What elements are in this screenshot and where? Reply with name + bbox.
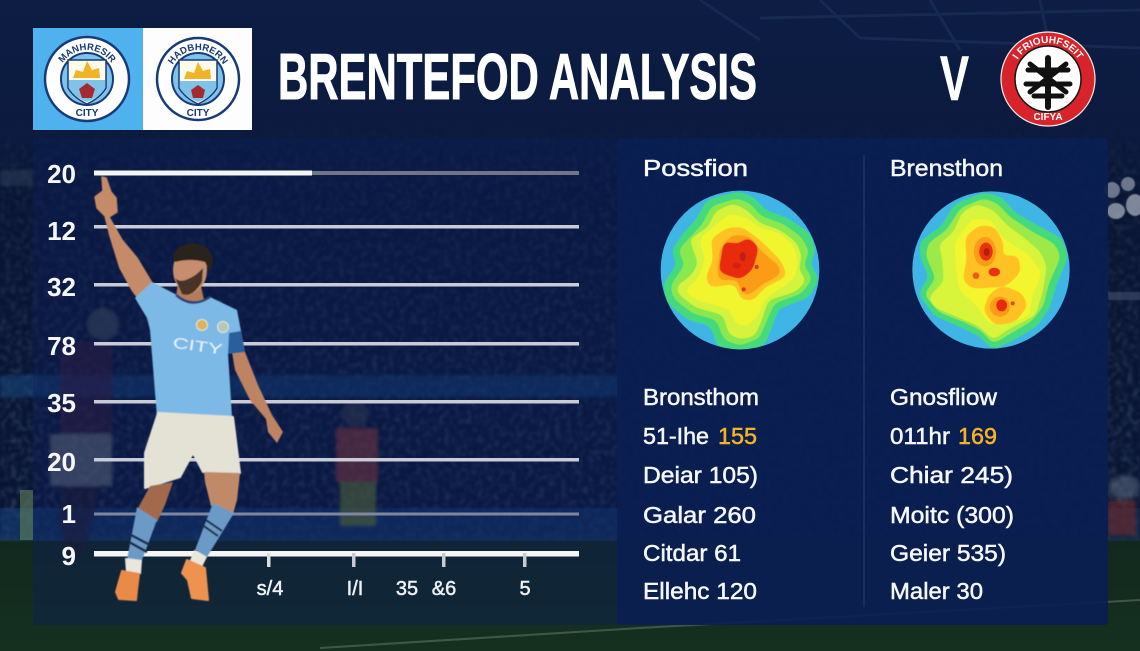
stats list: Gnosfliow column: 169 [958,423,997,449]
heading: Brensthon: Brensthon [890,155,1003,181]
y axis labels: 32 [47,272,76,302]
stats list: Bronsthom column: Ellehc 120 [643,578,757,604]
raised arm [95,177,153,298]
armband [228,331,245,354]
front boot [182,560,208,600]
panel: left chart backdrop [33,138,617,625]
jersey sponsor text: CITY [172,335,224,358]
jersey crests [196,320,228,332]
badge: Manchester City on white [143,28,252,130]
gridlines [94,170,579,567]
stats list: Bronsthom column: Citdar 61 [643,540,741,566]
y axis labels: 12 [47,216,76,246]
x axis labels: 35 [396,578,418,600]
stats list: Gnosfliow column: Gnosfliow [890,384,997,410]
stats list: Bronsthom column: Bronsthom [643,384,759,410]
x axis labels [257,578,531,600]
versus mark: V [940,44,969,114]
badge: Brentford red crest [1000,31,1096,127]
heading: Possfion: Possfion [643,155,748,181]
stats list: Bronsthom column: Galar 260 [643,502,756,528]
front leg [204,472,240,514]
blue jersey [135,282,245,417]
stats list: Gnosfliow column: Geier 535) [890,540,1006,566]
back leg [137,482,173,522]
badge: Manchester City on light blue [33,28,143,130]
y axis labels: 35 [47,388,76,418]
badge: Brentford red crest: I FRIOUHFSEIT [1012,36,1084,60]
stats list: Gnosfliow column: Chiar 245) [890,462,1013,488]
y axis labels: 9 [62,541,76,571]
stats list: Bronsthom column [643,384,759,604]
stats list: Bronsthom column: Deiar 105) [643,462,758,488]
stats list: Gnosfliow column [890,384,1014,604]
badge: Manchester City on white: CITY [187,108,210,119]
stats list: Bronsthom column: 51-Ihe [643,423,709,449]
y axis labels: 1 [62,499,76,529]
y axis labels: 20 [47,159,76,189]
stats list: Gnosfliow column: 011hr [890,423,950,449]
y axis labels: 78 [47,331,76,361]
x axis labels: s/4 [257,578,283,600]
player figure [95,177,283,600]
title: BRENTEFOD ANALYSIS [278,40,757,113]
badge: Manchester City on light blue: MANHRESIR [58,43,116,63]
y axis labels: 20 [47,447,76,477]
badge: Brentford red crest: CIFYA [1033,112,1063,123]
heatmap: Brensthon [912,191,1070,350]
divider between stats columns [864,155,865,607]
blurred background players [50,308,378,555]
lowered arm [232,352,283,443]
panel: right stats backdrop [617,138,1108,625]
x axis labels: &6 [432,578,456,600]
back sock [125,507,157,574]
badge: Manchester City on white: HADBHRERN [168,44,228,64]
back boot [116,571,139,600]
neck and head [173,243,213,308]
badge: Manchester City on light blue: CITY [76,108,99,119]
bar chart: horizontal lines with axis [47,159,579,600]
front sock [189,503,234,567]
x axis labels: 5 [519,578,531,600]
stats list: Gnosfliow column: Moitc (300) [890,502,1014,528]
stats list: Bronsthom column: 155 [718,423,757,449]
jersey collar [176,295,210,303]
shorts [145,413,240,488]
heatmap: Possfion [661,191,819,352]
x axis labels: I/I [347,578,363,600]
y axis labels [47,159,76,571]
stats list: Gnosfliow column: Maler 30 [890,578,983,604]
